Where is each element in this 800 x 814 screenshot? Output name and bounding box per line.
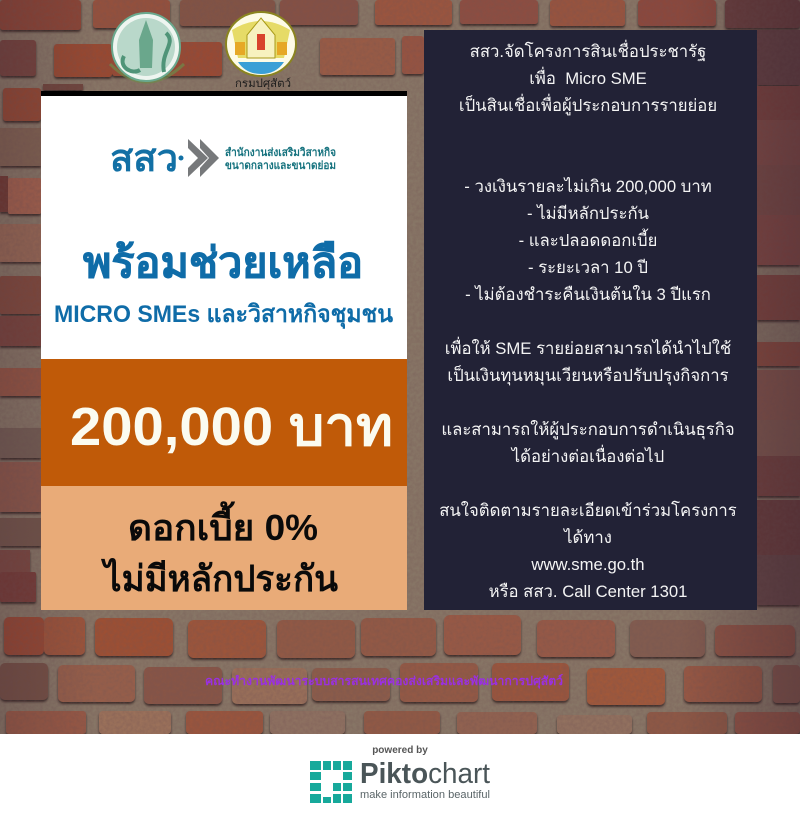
emblem: green circular seal bbox=[110, 13, 184, 82]
powered by label: powered by bbox=[372, 745, 428, 756]
icon: OSMEP chevrons bbox=[178, 139, 219, 177]
OSMEP logo name: ขนาดกลางและขนาดย่อม bbox=[225, 160, 336, 172]
panel: loan details text: และสามารถให้ผู้ประกอบการดำเนินธุรกิจ bbox=[441, 420, 735, 439]
panel: SME loan poster bbox=[41, 91, 407, 610]
no collateral: ไม่มีหลักประกัน bbox=[100, 557, 338, 599]
poster headline: พร้อมช่วยเหลือ bbox=[83, 239, 363, 286]
panel: loan details text: เพื่อ Micro SME bbox=[529, 69, 647, 88]
panel: loan details text: สนใจติดตามรายละเอียดเข้าร่วมโครงการ bbox=[439, 501, 737, 520]
poster subheadline: MICRO SMEs และวิสาหกิจชุมชน bbox=[54, 301, 394, 330]
Piktochart wordmark: Piktochart bbox=[360, 758, 490, 790]
panel: loan details text: www.sme.go.th bbox=[531, 555, 645, 574]
Piktochart tagline: make information beautiful bbox=[360, 789, 490, 801]
panel: loan details text: หรือ สสว. Call Center 1301 bbox=[489, 582, 687, 601]
panel: loan details text: ได้อย่างต่อเนื่องต่อไป bbox=[512, 447, 664, 466]
OSMEP logo name: สำนักงานส่งเสริมวิสาหกิจ bbox=[225, 146, 336, 159]
panel: loan details text: เป็นเงินทุนหมุนเวียนหรือปรับปรุงกิจการ bbox=[447, 366, 729, 385]
panel: loan details text: - และปลอดดอกเบี้ย bbox=[519, 231, 657, 250]
poster top bar bbox=[41, 91, 407, 96]
poster terms band bbox=[41, 486, 407, 610]
panel: loan details text bbox=[424, 30, 757, 610]
footer band bbox=[0, 734, 800, 814]
panel: loan details text: - วงเงินรายละไม่เกิน 200,000 บาท bbox=[464, 177, 712, 196]
OSMEP logo wordmark: สสว bbox=[110, 138, 178, 180]
poster amount band bbox=[41, 359, 407, 486]
panel: loan details text: - ไม่ต้องชำระคืนเงินต้นใน 3 ปีแรก bbox=[465, 285, 711, 304]
panel: loan details text: - ไม่มีหลักประกัน bbox=[527, 204, 649, 223]
icon: Piktochart logo bbox=[310, 761, 352, 803]
panel: loan details text: ได้ทาง bbox=[564, 528, 612, 547]
panel: loan details text: - ระยะเวลา 10 ปี bbox=[528, 258, 648, 277]
credit line: คณะทำงานพัฒนาระบบสารสนเทศคองส่งเสริมและพัฒนาการปศุสัตว์ bbox=[205, 674, 563, 689]
emblem caption: กรมปศุสัตว์ bbox=[235, 77, 291, 90]
panel: loan details text: เป็นสินเชื่อเพื่อผู้ประกอบการรายย่อย bbox=[459, 96, 717, 115]
panel: loan details text: เพื่อให้ SME รายย่อยสามารถได้นำไปใช้ bbox=[445, 339, 731, 358]
emblem: department of livestock seal bbox=[226, 12, 296, 76]
OSMEP logo name bbox=[225, 146, 336, 172]
panel: loan details text: สสว.จัดโครงการสินเชื่อประชารัฐ bbox=[470, 42, 706, 61]
interest rate: ดอกเบี้ย 0% bbox=[128, 501, 318, 548]
loan amount: 200,000 บาท bbox=[70, 397, 393, 457]
poster white section bbox=[41, 96, 407, 359]
